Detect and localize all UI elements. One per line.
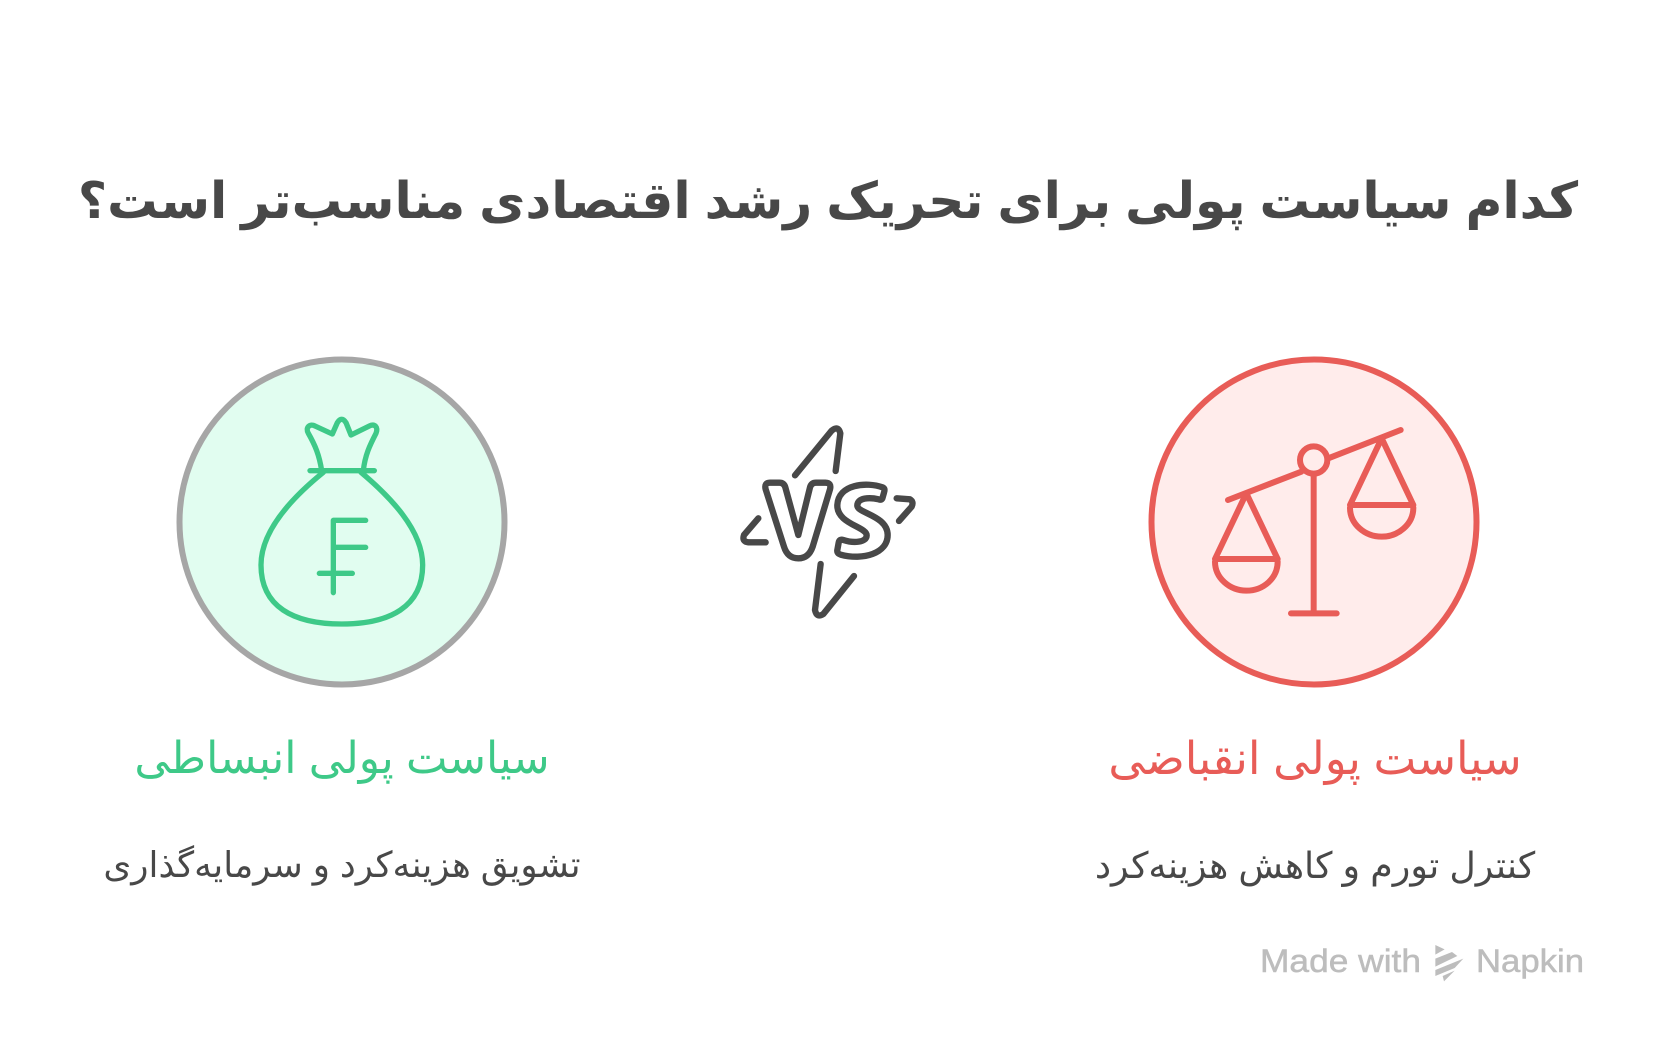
watermark: Made with Napkin: Napkin <box>1476 943 1584 979</box>
watermark: Made with Napkin: Made with <box>1260 943 1421 979</box>
heading: contractionary policy: سیاست پولی انقباضی <box>1108 733 1522 784</box>
description: expansionary policy: تشویق هزینه‌کرد و سرمایه‌گذاری <box>103 845 581 885</box>
description: contractionary policy: کنترل تورم و کاهش هزینه‌کرد <box>1095 845 1535 886</box>
title: کدام سیاست پولی برای تحریک رشد اقتصادی مناسب‌تر است؟ <box>78 172 1578 229</box>
heading: expansionary policy: سیاست پولی انبساطی <box>134 734 550 783</box>
